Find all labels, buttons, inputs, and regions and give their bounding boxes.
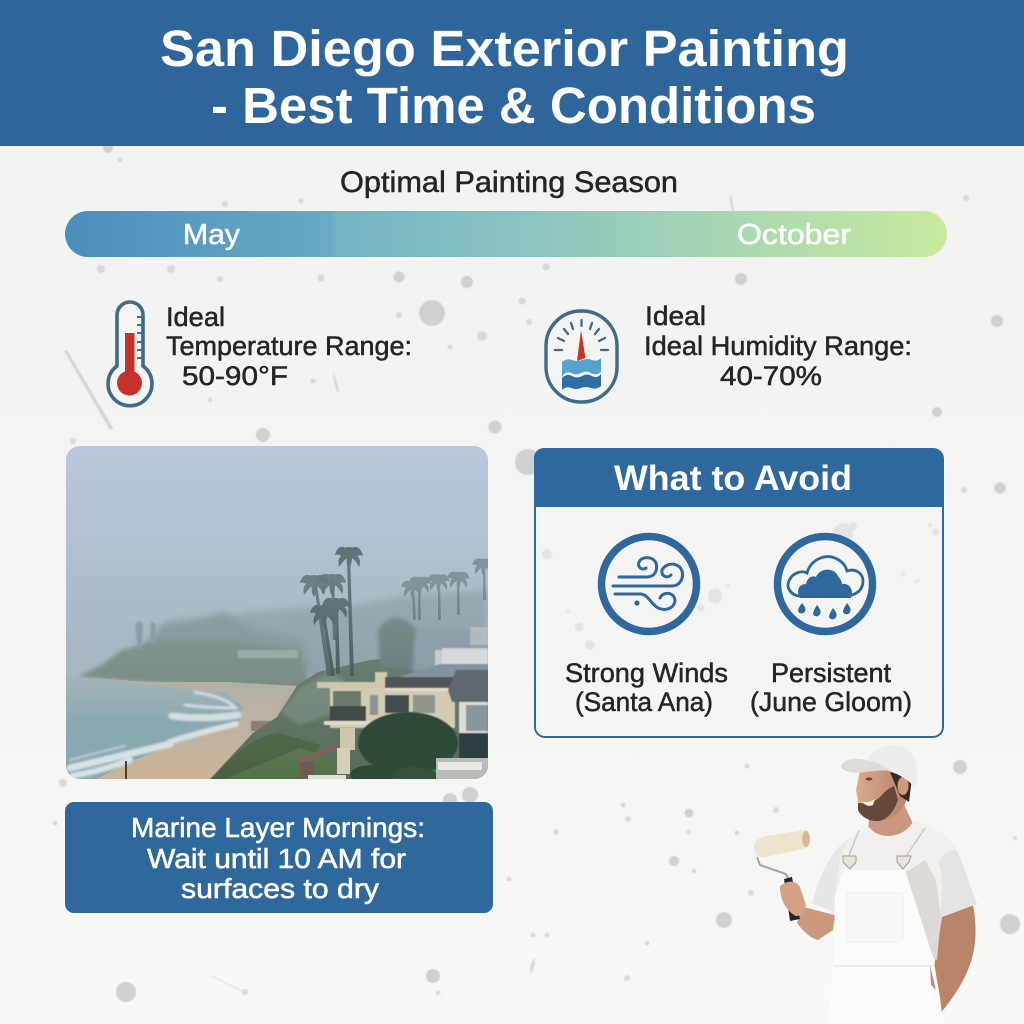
temperature range text: 50-90°F [182, 361, 288, 391]
foreground shrubs [340, 728, 355, 750]
shirt [812, 820, 977, 960]
hair and ear [890, 772, 912, 802]
painter figure with roller [754, 745, 977, 1024]
label: persistent June Gloom [750, 658, 912, 717]
caption: marine layer mornings: surfaces to dry [181, 873, 379, 904]
icon: thermometer [108, 302, 152, 406]
right arm [930, 905, 976, 1016]
beach [76, 677, 297, 779]
heading: optimal painting season: Optimal Painting Season [340, 166, 678, 199]
head [856, 770, 906, 821]
headland [78, 640, 310, 690]
humidity range text: 40-70% [720, 361, 822, 391]
panel header [534, 448, 943, 507]
cap [866, 745, 917, 788]
icon: humidity gauge [546, 311, 617, 402]
caption: marine layer mornings: Marine Layer Mornings: [131, 812, 425, 843]
panel: what to avoid [534, 448, 943, 737]
label: strong winds: (Santa Ana) [575, 687, 713, 717]
humidity range text: Ideal Humidity Range: [644, 331, 912, 361]
surf [70, 692, 238, 776]
houses [317, 627, 488, 761]
fog overlay [84, 547, 488, 746]
beard [858, 786, 898, 821]
overalls [827, 870, 943, 1024]
title: - Best Time & Conditions [211, 77, 816, 134]
icon: wind [602, 536, 696, 632]
paint roller [754, 830, 810, 921]
left forearm [797, 907, 835, 940]
season gradient bar: October [737, 219, 851, 251]
humidity range text [644, 301, 912, 391]
temperature range text [166, 302, 412, 391]
label: persistent June Gloom: Persistent [771, 658, 891, 688]
hazy hillside trees and houses [378, 618, 417, 668]
label: strong winds: Strong Winds [565, 658, 728, 688]
header band [0, 0, 1024, 146]
photo: foggy coastal San Diego marine layer [66, 446, 495, 785]
icon: rain cloud [778, 536, 872, 632]
palm trees [300, 547, 495, 676]
sea [66, 677, 243, 779]
caption: marine layer mornings: Wait until 10 AM for [147, 843, 406, 874]
panel header: What to Avoid [614, 459, 852, 498]
hand [780, 882, 806, 916]
label: strong winds [565, 658, 728, 717]
humidity range text: Ideal [645, 301, 706, 331]
caption: marine layer mornings [65, 802, 493, 913]
title: San Diego Exterior Painting [160, 20, 849, 77]
neck [868, 802, 914, 839]
hazy far ridge [234, 589, 488, 679]
temperature range text: Ideal [166, 302, 225, 332]
season gradient bar [65, 211, 947, 257]
title [160, 20, 849, 134]
temperature range text: Temperature Range: [166, 331, 412, 361]
green bluff [210, 650, 488, 779]
label: persistent June Gloom: (June Gloom) [750, 687, 912, 717]
season gradient bar: May [183, 219, 241, 251]
